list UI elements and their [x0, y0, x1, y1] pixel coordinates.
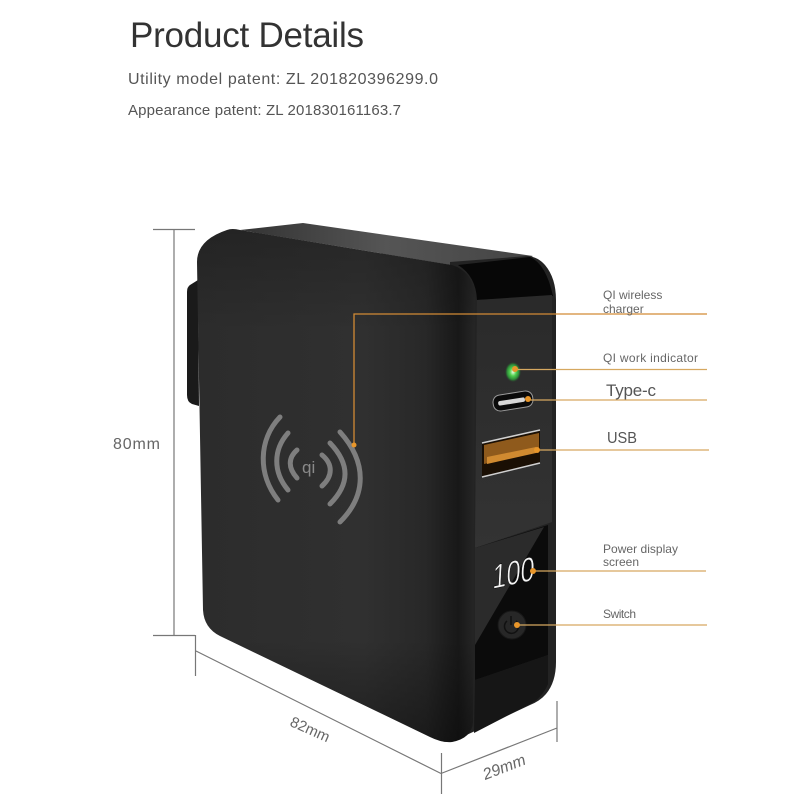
callout: Switch	[514, 607, 707, 628]
callout: Qi wireless charger: charger	[603, 302, 644, 316]
power bank product	[187, 223, 556, 742]
callout: Qi work indicator	[512, 351, 707, 372]
display panel	[475, 525, 548, 680]
icon: wireless charging	[263, 417, 360, 522]
end panel housing	[450, 256, 556, 742]
switch button	[498, 611, 526, 639]
callout: Power display screen: Power display	[603, 542, 678, 556]
callout: Power display screen	[530, 542, 706, 574]
title: Product Details	[130, 16, 364, 55]
length label: 82mm	[287, 714, 332, 746]
power display reading: 100	[492, 550, 536, 597]
bottom section	[474, 655, 548, 733]
top side of housing	[240, 223, 533, 275]
callout: USB: USB	[607, 430, 637, 447]
length dimension: 82mm	[196, 635, 441, 774]
callout: Qi wireless charger	[352, 288, 707, 448]
ports panel	[475, 295, 552, 548]
display panel light reflection	[475, 527, 544, 645]
utility model patent text: Utility model patent: ZL 201820396299.0	[128, 71, 438, 88]
Type-C port	[492, 390, 534, 412]
callout: Type-c: Type-c	[606, 381, 656, 400]
callout: Qi wireless charger: QI wireless	[603, 288, 662, 302]
height label: 80mm	[113, 436, 160, 453]
depth label: 29mm	[480, 752, 528, 784]
callout: Switch: Switch	[603, 607, 636, 621]
main face shading	[197, 229, 475, 742]
main face	[197, 229, 475, 742]
callout: USB	[534, 430, 709, 453]
indicator LED	[505, 362, 521, 382]
height dimension: 80mm	[153, 230, 195, 636]
icon: qi mark: qi	[302, 458, 315, 477]
depth dimension: 29mm	[441, 701, 557, 794]
callout: Type-c	[525, 381, 707, 402]
plug prong	[187, 280, 199, 406]
callout: Power display screen: screen	[603, 555, 639, 569]
callout: Qi work indicator: QI work indicator	[603, 351, 698, 365]
appearance patent text: Appearance patent: ZL 201830161163.7	[128, 102, 401, 119]
top black band	[458, 257, 553, 300]
USB port	[482, 430, 540, 477]
